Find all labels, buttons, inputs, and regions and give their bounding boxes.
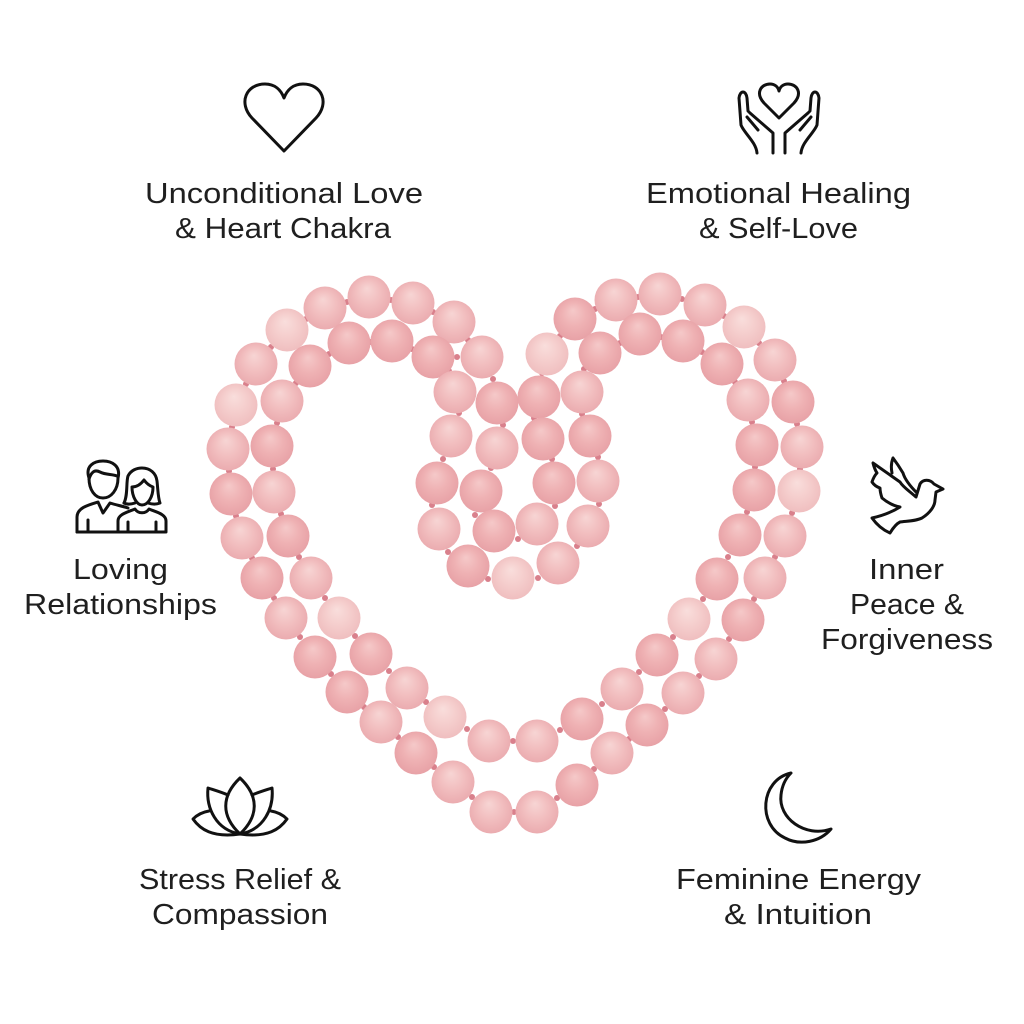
label: unconditional love: & Heart Chakra bbox=[175, 213, 392, 245]
center coil beads bbox=[416, 370, 620, 600]
benefit: unconditional love bbox=[145, 84, 423, 245]
label: emotional healing: & Self-Love bbox=[699, 213, 858, 245]
label: feminine energy bbox=[676, 864, 922, 931]
label: inner peace: Forgiveness bbox=[821, 624, 993, 656]
icon: hands holding heart bbox=[739, 84, 819, 153]
label: emotional healing: Emotional Healing bbox=[646, 178, 911, 210]
icon: heart bbox=[245, 84, 323, 151]
label: stress relief: Stress Relief & bbox=[139, 864, 341, 896]
inner strand beads bbox=[250, 312, 778, 762]
benefit: stress relief bbox=[139, 778, 341, 931]
label: loving relationships bbox=[24, 554, 217, 621]
label: unconditional love bbox=[145, 178, 423, 245]
label: stress relief: Compassion bbox=[152, 899, 328, 931]
icon: dove bbox=[872, 458, 943, 533]
label: emotional healing bbox=[646, 178, 911, 245]
icon: lotus bbox=[193, 778, 287, 835]
icon: couple bbox=[77, 461, 166, 532]
benefit: emotional healing bbox=[646, 84, 911, 245]
label: inner peace bbox=[821, 554, 993, 656]
label: loving relationships: Relationships bbox=[24, 589, 217, 621]
label: feminine energy: Feminine Energy bbox=[676, 864, 922, 896]
icon: crescent moon bbox=[766, 773, 831, 842]
label: loving relationships: Loving bbox=[73, 554, 168, 586]
benefit: loving relationships bbox=[24, 461, 217, 621]
label: feminine energy: & Intuition bbox=[724, 899, 872, 931]
benefit: feminine energy bbox=[676, 773, 922, 931]
benefit: inner peace bbox=[821, 458, 993, 656]
label: inner peace: Inner bbox=[869, 554, 944, 586]
outer strand beads bbox=[206, 272, 824, 834]
heart-shaped rose quartz bead necklace bbox=[206, 272, 824, 834]
label: stress relief bbox=[139, 864, 341, 931]
label: inner peace: Peace & bbox=[850, 589, 964, 621]
label: unconditional love: Unconditional Love bbox=[145, 178, 423, 210]
knots between beads bbox=[226, 294, 803, 815]
